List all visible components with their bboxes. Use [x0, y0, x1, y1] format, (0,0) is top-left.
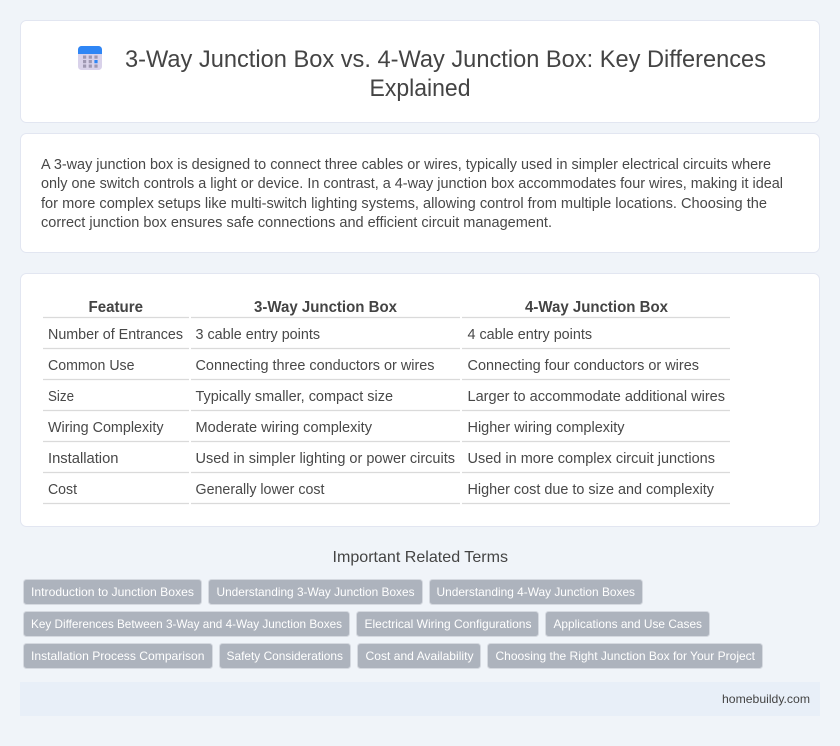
tag: installation process [24, 644, 212, 668]
table row: common use: Connecting four conductors or wires [468, 358, 699, 374]
text block: description [41, 157, 783, 231]
table row: common use [48, 358, 699, 374]
panel: comparison table card [20, 274, 820, 526]
table row: common use: Common Use [48, 358, 134, 374]
table header: 4-Way Junction Box [525, 299, 668, 316]
tag: key differences [24, 612, 350, 636]
text block: description: only one switch controls a light or device. In contrast, a 4-way junction box accommodates four wires, making it ideal [41, 176, 783, 192]
title: 3-Way Junction Box vs. 4-Way Junction Box: Key Differences [125, 46, 766, 73]
icon: calendar [78, 46, 102, 70]
table row: installation [48, 451, 715, 467]
table row: cost: Generally lower cost [196, 482, 324, 498]
table row: installation: Installation [48, 451, 118, 467]
tag: safety: Safety Considerations [226, 649, 343, 663]
table row: size: Size [48, 389, 74, 405]
tag: introduction: Introduction to Junction Boxes [31, 585, 194, 599]
tag: applications [546, 612, 710, 636]
table row: cost: Cost [48, 482, 77, 498]
tag: understanding 4-way: Understanding 4-Way Junction Boxes [436, 585, 635, 599]
panel: header card [20, 20, 820, 122]
footer [20, 682, 820, 716]
tag: choosing [488, 644, 762, 668]
title: Explained [370, 75, 470, 102]
text block: description: A 3-way junction box is designed to connect three cables or wires, typically used in simpler electrical circuits where [41, 157, 771, 173]
table header: Feature [88, 299, 143, 316]
tag: choosing: Choosing the Right Junction Box for Your Project [496, 649, 756, 663]
tag: key differences: Key Differences Between 3-Way and 4-Way Junction Boxes [31, 617, 342, 631]
related term tags [24, 580, 762, 668]
table row: size: Typically smaller, compact size [196, 389, 393, 405]
table row: common use: Connecting three conductors or wires [196, 358, 434, 374]
tag: cost and availability [358, 644, 480, 668]
table row: wiring complexity: Moderate wiring complexity [196, 420, 373, 436]
tag: understanding 3-way [208, 580, 422, 604]
tag: cost and availability: Cost and Availability [366, 649, 474, 663]
tag: wiring configurations: Electrical Wiring Configurations [364, 617, 532, 631]
tag: understanding 4-way [430, 580, 642, 604]
tag: wiring configurations [356, 612, 538, 636]
table row: number of entrances: 3 cable entry points [196, 327, 320, 343]
table row: size: Larger to accommodate additional wires [468, 389, 725, 405]
panel: description card [20, 134, 820, 252]
table row: installation: Used in more complex circuit junctions [468, 451, 715, 467]
tag: introduction [24, 580, 202, 604]
table row: installation: Used in simpler lighting or power circuits [196, 451, 455, 467]
title [125, 46, 766, 102]
table row: wiring complexity [48, 420, 625, 436]
footer: homebuildy.com [722, 692, 810, 706]
table row: wiring complexity: Higher wiring complexity [468, 420, 625, 436]
tag: installation process: Installation Process Comparison [31, 649, 204, 663]
text block: description: correct junction box ensures safe connections and efficient circuit management. [41, 215, 552, 231]
heading: important related terms: Important Related Terms [332, 549, 508, 566]
table row: number of entrances: 4 cable entry points [468, 327, 592, 343]
table row: number of entrances [48, 327, 592, 343]
table row: cost [48, 482, 715, 498]
table row: size [48, 389, 725, 405]
tag: understanding 3-way: Understanding 3-Way Junction Boxes [216, 585, 414, 599]
text block: description: for more complex setups like multi-switch lighting systems, allowing control from multiple locations. Choosing the [41, 196, 767, 212]
table header: 3-Way Junction Box [254, 299, 397, 316]
table row: cost: Higher cost due to size and complexity [468, 482, 715, 498]
tag: safety [220, 644, 350, 668]
table row: wiring complexity: Wiring Complexity [48, 420, 164, 436]
table row: number of entrances: Number of Entrances [48, 327, 183, 343]
tag: applications: Applications and Use Cases [554, 617, 702, 631]
table header [88, 299, 668, 316]
